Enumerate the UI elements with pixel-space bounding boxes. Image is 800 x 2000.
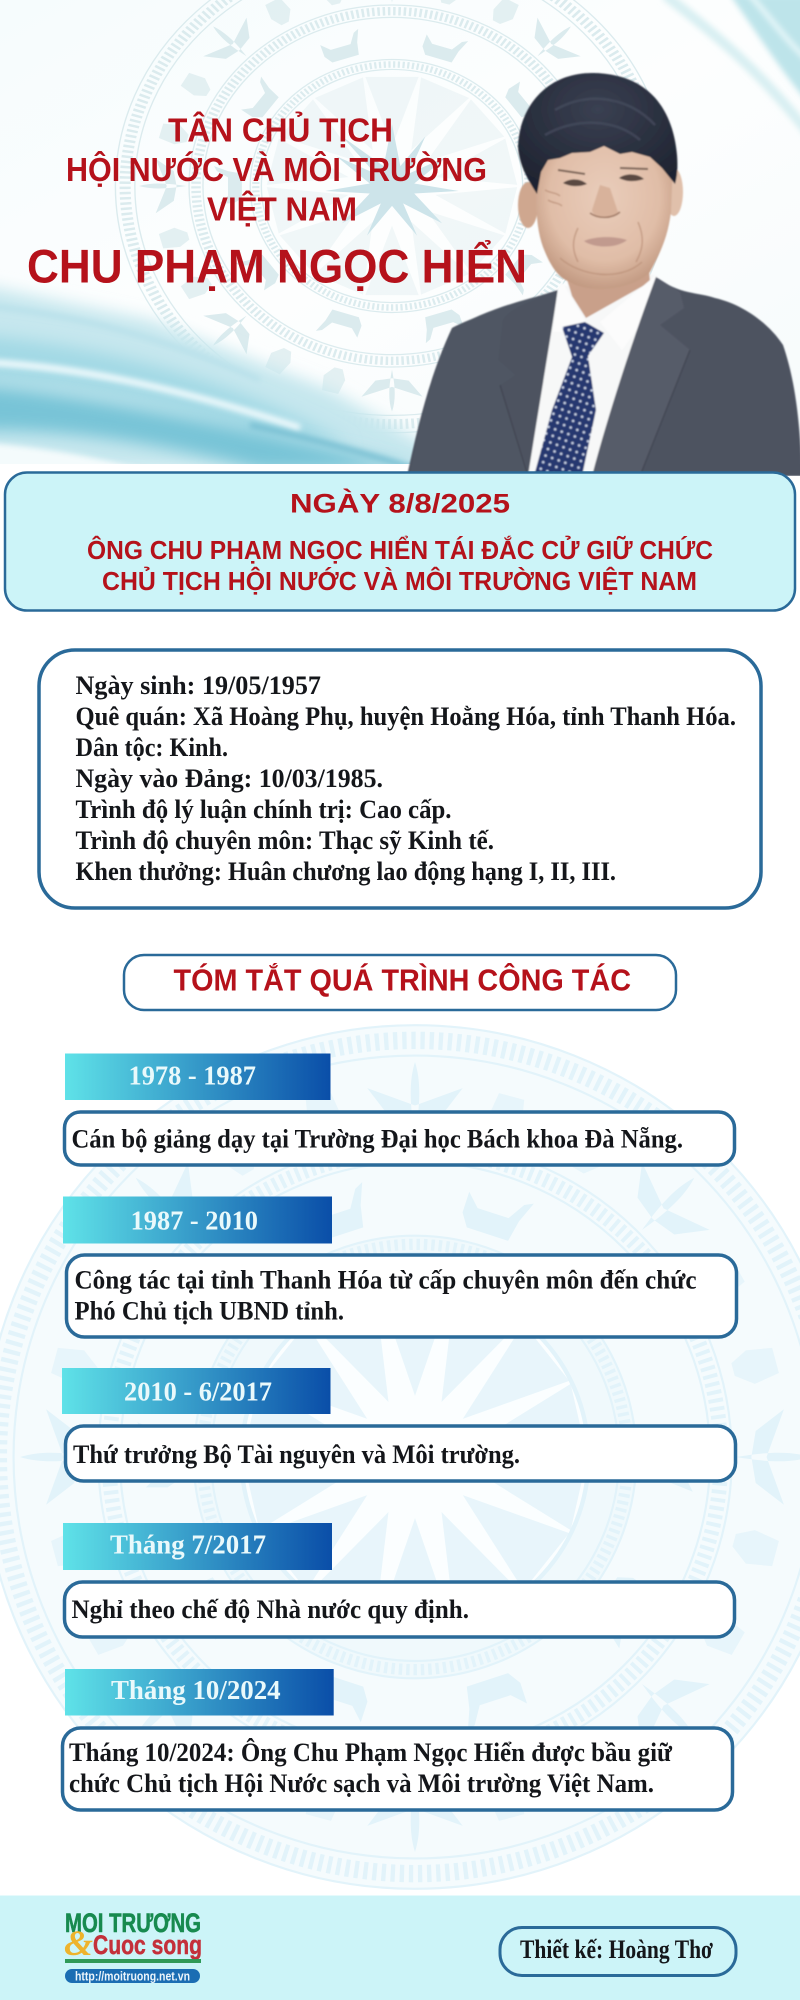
neck	[567, 272, 651, 318]
logo: Môi trường & Cuộc sống: MOI TRƯƠNG	[65, 1908, 201, 1938]
year bar	[65, 1669, 334, 1716]
description box	[66, 1426, 736, 1481]
description box: Nghỉ theo chế độ Nhà nước quy định.	[72, 1595, 469, 1624]
mouth	[584, 237, 627, 247]
description box: Công tác tại tỉnh Thanh Hóa từ cấp chuyên môn đến chức	[74, 1266, 696, 1294]
hero waves bottom left	[0, 282, 416, 464]
timeline item: 1978 - 1987	[64, 1054, 734, 1165]
hometown: Quê quán: Xã Hoàng Phụ, huyện Hoằng Hóa, tỉnh Thanh Hóa.	[76, 702, 736, 731]
panel: personal information	[39, 650, 761, 908]
logo: Môi trường & Cuộc sống: http://moitruong.net.vn	[75, 1968, 190, 1984]
title line 2: HỘI NƯỚC VÀ MÔI TRƯỜNG	[66, 150, 487, 188]
shirt	[528, 272, 658, 476]
lower background: bronze drum pattern	[0, 1025, 800, 1889]
birth date: Ngày sinh: 19/05/1957	[76, 671, 321, 700]
title line 1: TÂN CHỦ TỊCH	[168, 112, 393, 148]
eyes	[563, 174, 644, 186]
description box: Phó Chủ tịch UBND tỉnh.	[74, 1297, 344, 1326]
designer credit: Thiết kế: Hoàng Thơ	[520, 1935, 713, 1964]
designer credit	[500, 1928, 736, 1976]
facial wrinkles	[545, 190, 642, 274]
panel: announcement	[5, 472, 795, 610]
hero background	[0, 0, 800, 464]
collar	[559, 280, 651, 288]
timeline item: 2010 - 6/2017	[62, 1368, 736, 1481]
face	[536, 145, 672, 282]
heading: career summary: TÓM TẮT QUÁ TRÌNH CÔNG TÁC	[174, 962, 631, 998]
description box	[64, 1112, 734, 1165]
timeline item: 1987 - 2010	[63, 1196, 736, 1337]
portrait of Chu Phạm Ngọc Hiển	[407, 73, 800, 476]
title line 3: VIỆT NAM	[207, 190, 357, 228]
logo: Môi trường & Cuộc sống: Cuoc song	[93, 1930, 202, 1960]
year bar: 1987 - 2010	[131, 1206, 258, 1236]
description box: Tháng 10/2024: Ông Chu Phạm Ngọc Hiển được bầu giữ	[69, 1738, 672, 1767]
year bar	[62, 1368, 330, 1414]
suit jacket	[407, 277, 800, 476]
logo: Môi trường & Cuộc sống	[64, 1908, 202, 1984]
person name: CHU PHẠM NGỌC HIỂN	[27, 240, 527, 293]
hero waves top right	[665, 0, 800, 135]
year bar	[63, 1523, 332, 1570]
hair strands	[545, 99, 655, 140]
nose	[592, 185, 618, 217]
announcement date: NGÀY 8/8/2025	[290, 488, 510, 519]
year bar	[63, 1196, 332, 1244]
description box: Cán bộ giảng dạy tại Trường Đại học Bách khoa Đà Nẵng.	[72, 1125, 683, 1154]
logo: Môi trường & Cuộc sống: &	[64, 1923, 93, 1963]
timeline item: Tháng 7/2017	[63, 1523, 734, 1637]
year bar: Tháng 7/2017	[110, 1530, 266, 1560]
year bar: 2010 - 6/2017	[124, 1376, 272, 1406]
year bar: Tháng 10/2024	[111, 1675, 281, 1705]
year bar	[65, 1054, 330, 1100]
year bar: 1978 - 1987	[128, 1060, 256, 1090]
hero drum pattern	[115, 0, 669, 433]
professional level: Trình độ chuyên môn: Thạc sỹ Kinh tế.	[76, 826, 494, 855]
announcement line 2: CHỦ TỊCH HỘI NƯỚC VÀ MÔI TRƯỜNG VIỆT NAM	[102, 565, 697, 596]
tie	[534, 322, 604, 476]
ears	[518, 182, 538, 228]
description box	[64, 1582, 734, 1637]
title block	[27, 112, 527, 293]
description box: chức Chủ tịch Hội Nước sạch và Môi trường Việt Nam.	[69, 1769, 654, 1798]
awards: Khen thưởng: Huân chương lao động hạng I, II, III.	[76, 857, 616, 886]
description box	[66, 1255, 736, 1337]
description box	[62, 1728, 732, 1810]
description box: Thứ trưởng Bộ Tài nguyên và Môi trường.	[73, 1440, 520, 1469]
ethnicity: Dân tộc: Kinh.	[76, 733, 228, 762]
political level: Trình độ lý luận chính trị: Cao cấp.	[76, 795, 452, 824]
heading: career summary	[124, 955, 676, 1010]
jacket lapels	[472, 296, 536, 319]
party date: Ngày vào Đảng: 10/03/1985.	[76, 764, 383, 793]
hair	[518, 73, 677, 194]
footer band	[0, 1896, 800, 2000]
announcement line 1: ÔNG CHU PHẠM NGỌC HIỂN TÁI ĐẮC CỬ GIỮ CHỨC	[87, 534, 713, 565]
timeline item: Tháng 10/2024	[62, 1669, 732, 1810]
hero banner	[0, 0, 800, 480]
